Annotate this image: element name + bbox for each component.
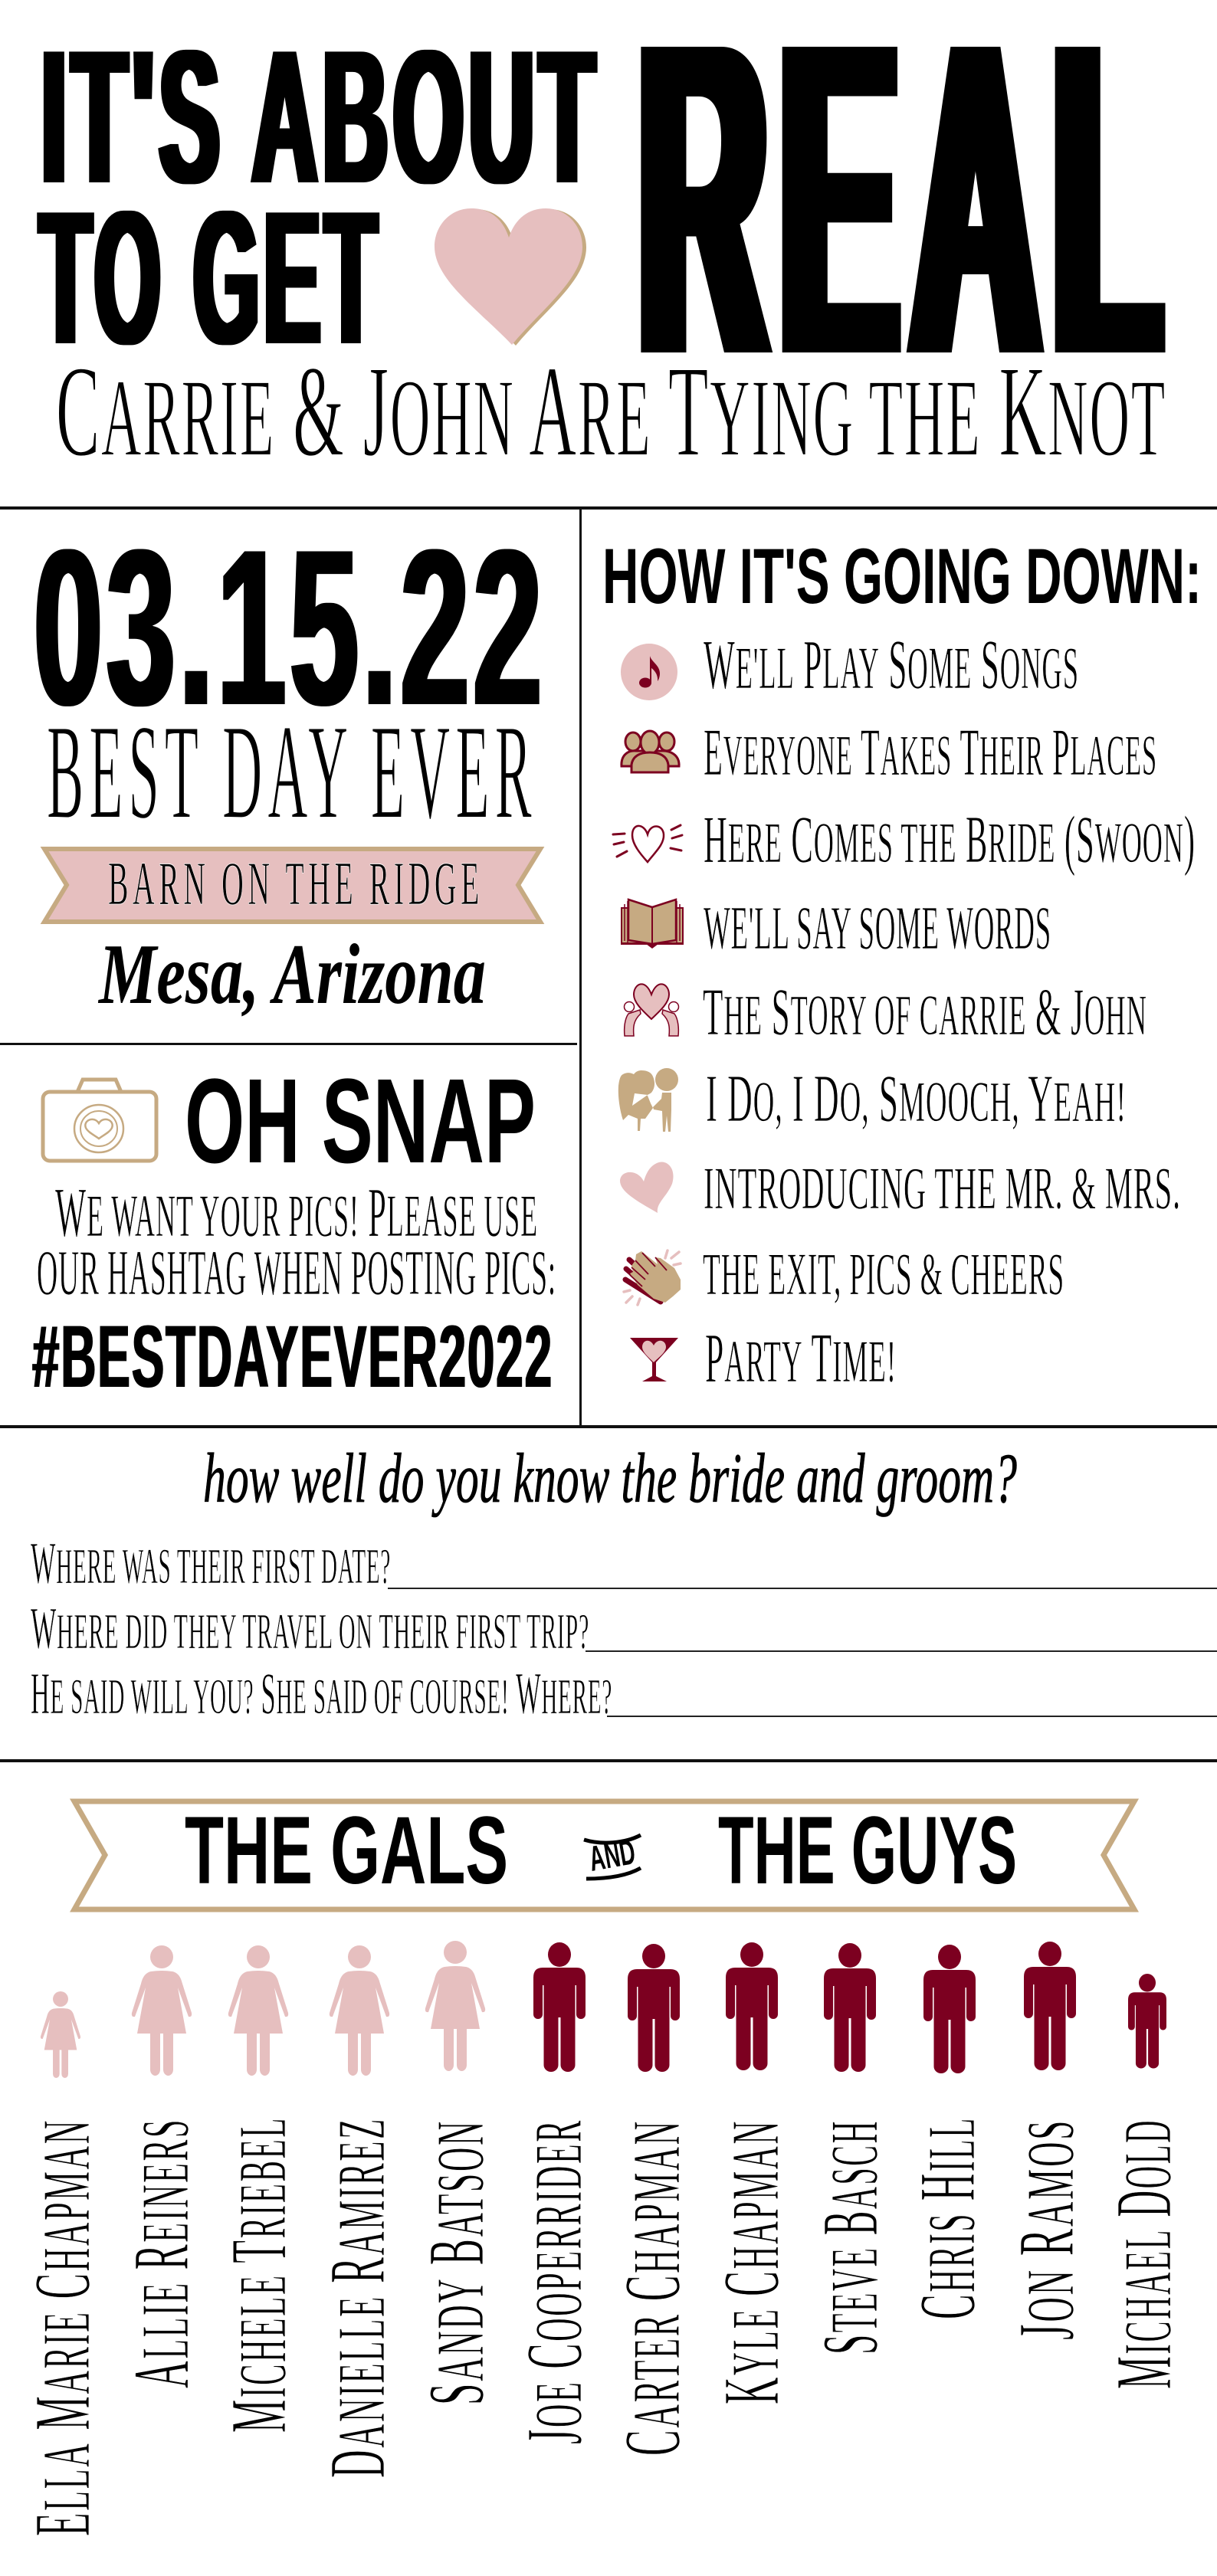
body line one: WE WANT YOUR PICS! PLEASE USE <box>55 1173 538 1251</box>
ribbon shape <box>44 849 540 922</box>
icon: clapping hands <box>624 1250 681 1305</box>
question text: HE SAID WILL YOU? SHE SAID OF COURSE! WHERE? <box>31 1660 612 1726</box>
location: Mesa, Arizona <box>97 927 486 1022</box>
question 2: WHERE DID THEY TRAVEL ON THEIR FIRST TRIP? <box>31 1595 589 1661</box>
label: I DO, I DO, SMOOCH, YEAH! <box>706 1062 1127 1136</box>
icon: couple holding heart <box>624 984 679 1036</box>
and: AND <box>586 1831 638 1879</box>
name: Danielle Ramirez: DANIELLE RAMIREZ <box>313 2117 402 2478</box>
guy figure: Chris Hill <box>923 1945 976 2073</box>
icon: group of people <box>622 731 679 772</box>
label: PARTY TIME! <box>705 1319 897 1397</box>
the gals: THE GALS <box>185 1798 508 1904</box>
heading: oh snap: OH SNAP <box>185 1054 536 1188</box>
name: Jon Ramos: JON RAMOS <box>1002 2119 1091 2340</box>
panel: wedding party <box>18 1798 1188 2536</box>
name: Michele Triebel: MICHELE TRIEBEL <box>215 2116 303 2433</box>
icon: swooning heart <box>613 825 682 862</box>
name: Sandy Batson: SANDY BATSON <box>412 2119 500 2405</box>
icon: camera <box>43 1080 156 1161</box>
question 1: WHERE WAS THEIR FIRST DATE? <box>31 1530 391 1596</box>
guy figure: Steve Basch <box>824 1943 876 2072</box>
name: Ella Marie Chapman: ELLA MARIE CHAPMAN <box>18 2119 107 2536</box>
name: Chris Hill: CHRIS HILL <box>904 2116 992 2319</box>
gal figure: Ella Marie Chapman <box>41 1991 80 2078</box>
answer line <box>388 1588 1217 1589</box>
hashtag: #BESTDAYEVER2022 <box>32 1308 553 1406</box>
the guys: THE GUYS <box>718 1798 1017 1904</box>
answer line <box>607 1716 1217 1717</box>
schedule item 6 <box>618 1062 1127 1136</box>
ribbon banner: venue <box>44 849 540 922</box>
ribbon banner: venue: BARN ON THE RIDGE <box>108 850 484 918</box>
gal figure: Michele Triebel <box>228 1945 288 2076</box>
panel: header <box>40 0 1175 483</box>
guy figure: Kyle Chapman <box>726 1942 778 2070</box>
name: Steve Basch: STEVE BASCH <box>806 2119 894 2355</box>
text: OUR HASHTAG WHEN POSTING PICS: <box>37 1237 556 1309</box>
name: Joe Cooperrider: JOE COOPERRIDER <box>510 2119 599 2444</box>
panel: oh snap <box>32 1054 556 1406</box>
schedule item 5 <box>624 975 1147 1050</box>
and <box>584 1831 641 1879</box>
name: Carter Chapman: CARTER CHAPMAN <box>608 2119 697 2456</box>
panel: header: TO GET <box>40 171 382 384</box>
icon: martini glass <box>630 1338 678 1381</box>
ribbon banner: the gals and the guys <box>74 1798 1134 1909</box>
schedule item 1 <box>621 625 1079 703</box>
icon: music note <box>621 644 677 700</box>
guy figure: Joe Cooperrider <box>533 1942 586 2072</box>
name: Allie Reiners: ALLIE REINERS <box>117 2118 205 2388</box>
icon: pink heart <box>435 208 586 346</box>
guy figure: Jon Ramos <box>1024 1942 1076 2070</box>
panel: header: IT'S ABOUT <box>41 10 600 223</box>
answer line <box>586 1650 1217 1652</box>
gal figure: Sandy Batson <box>425 1941 485 2071</box>
name: Kyle Chapman: KYLE CHAPMAN <box>707 2119 795 2404</box>
name: Michael Dold: MICHAEL DOLD <box>1100 2119 1188 2389</box>
gal figure: Danielle Ramirez <box>330 1945 389 2076</box>
date: 03.15.22 <box>34 503 546 752</box>
gal figure: Allie Reiners <box>132 1945 192 2076</box>
ribbon shape <box>74 1801 1134 1909</box>
schedule item 4 <box>621 895 1051 962</box>
guy figure: Michael Dold <box>1128 1974 1166 2068</box>
schedule item 8 <box>624 1240 1064 1307</box>
label: WE'LL PLAY SOME SONGS <box>704 625 1079 703</box>
guy figure: Carter Chapman <box>628 1944 680 2072</box>
schedule item 3 <box>613 803 1196 877</box>
schedule item 2 <box>622 716 1157 790</box>
schedule item 7 <box>620 1155 1181 1221</box>
panel: quiz <box>31 1439 1217 1726</box>
icon: tilted pink heart <box>620 1162 674 1213</box>
panel: date and venue <box>34 503 546 1022</box>
panel: how it's going down <box>602 533 1202 1397</box>
schedule item 9 <box>630 1319 897 1397</box>
icon: kissing couple <box>618 1068 678 1132</box>
icon: open book <box>621 900 684 949</box>
